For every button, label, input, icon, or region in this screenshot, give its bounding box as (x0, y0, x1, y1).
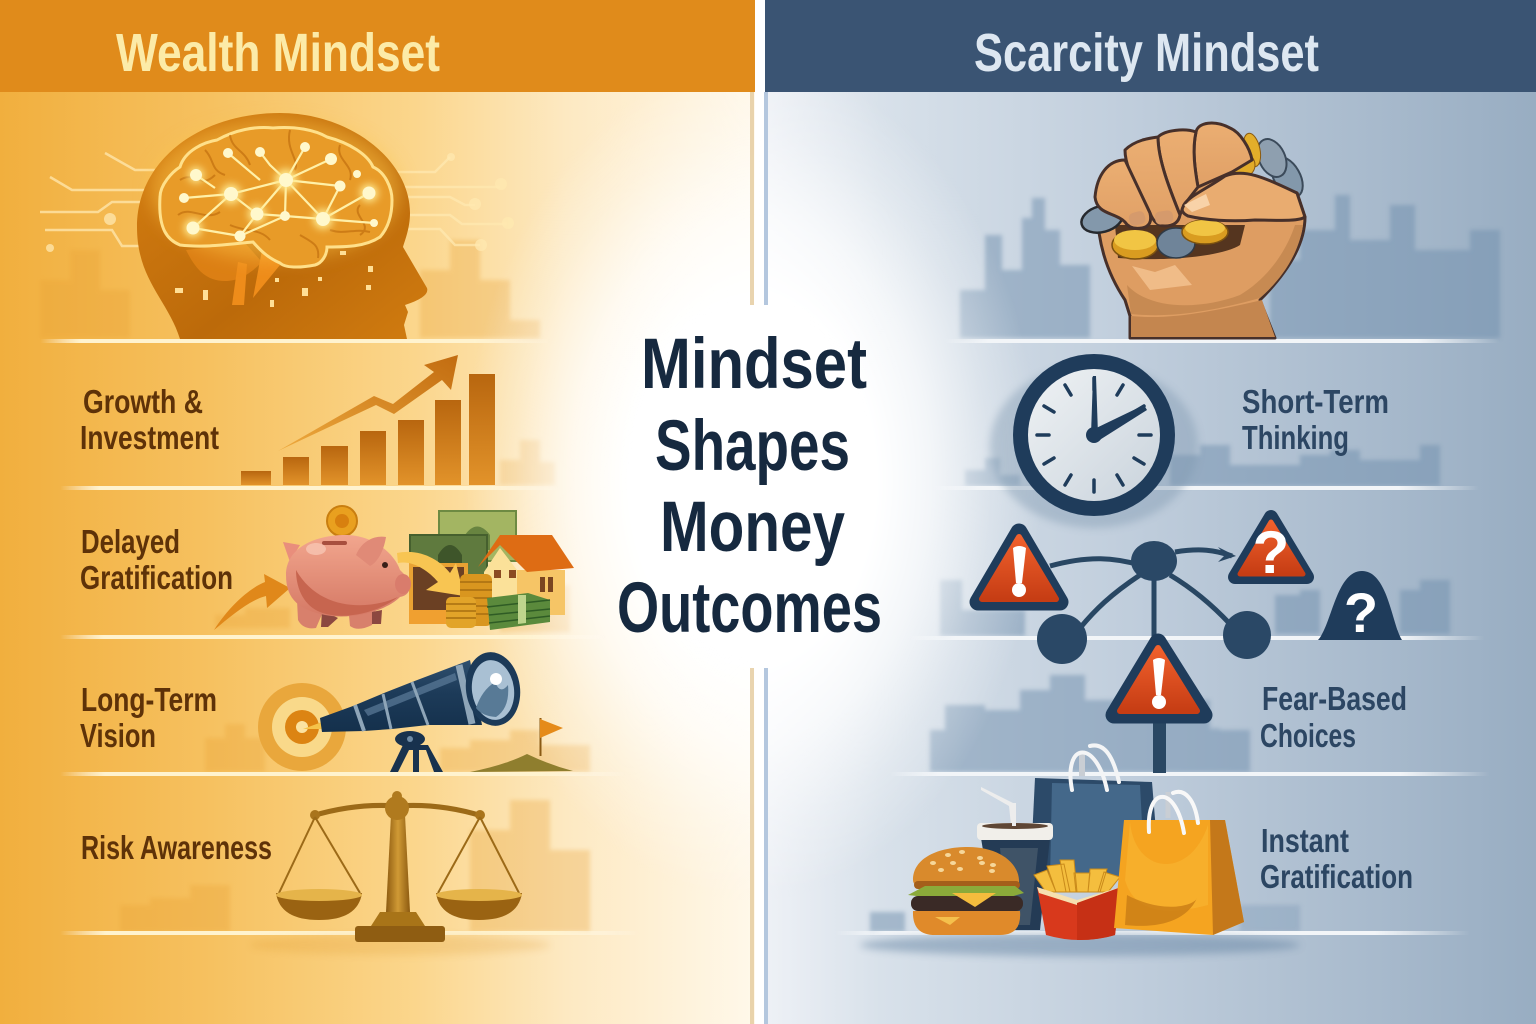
label: instant gratification (1260, 822, 1413, 895)
label: delayed gratification (80, 523, 233, 596)
label: growth & investment: Investment (80, 419, 219, 456)
label: fear-based choices: Choices (1260, 717, 1356, 754)
title: mindset shapes money outcomes: Mindset (641, 325, 867, 404)
title: mindset shapes money outcomes (617, 325, 882, 648)
label: long-term vision: Long-Term (81, 681, 217, 718)
heading bar: wealth mindset (0, 0, 755, 92)
label: instant gratification: Instant (1261, 822, 1349, 859)
panel: scarcity background (765, 92, 1536, 1024)
icon: piggy bank, money and house (214, 506, 574, 630)
icon: telescope with target and flag (258, 649, 573, 772)
label: short-term thinking: Short-Term (1242, 383, 1389, 420)
label: short-term thinking: Thinking (1242, 419, 1349, 456)
icon: balance scale (250, 791, 550, 955)
label: long-term vision (80, 681, 217, 754)
label: instant gratification: Gratification (1260, 858, 1413, 895)
title: mindset shapes money outcomes: Money (660, 488, 845, 567)
icon: clock (990, 354, 1198, 528)
heading bar: scarcity mindset (765, 0, 1536, 92)
label: delayed gratification: Delayed (81, 523, 180, 560)
title: mindset shapes money outcomes: Outcomes (617, 569, 882, 648)
icon: fist clutching coins (1078, 123, 1309, 338)
title: mindset shapes money outcomes: Shapes (655, 407, 850, 486)
icon: fast food and shopping bags (860, 745, 1300, 956)
icon: fear decision network with warnings (978, 517, 1402, 773)
label: fear-based choices: Fear-Based (1262, 680, 1407, 717)
left city silhouettes (40, 240, 590, 932)
heading bar: scarcity mindset: Scarcity Mindset (974, 23, 1319, 83)
icon: fear decision network with warnings: ? (1344, 581, 1378, 644)
icon: fear decision network with warnings: ? (1253, 519, 1289, 586)
panel: wealth background (0, 92, 755, 1024)
label: delayed gratification: Gratification (80, 559, 233, 596)
icon: glowing brain in head (40, 113, 514, 339)
heading bar: wealth mindset: Wealth Mindset (116, 23, 440, 83)
label: growth & investment (80, 383, 219, 456)
shelves (40, 339, 1500, 935)
divider lines (750, 92, 768, 1024)
label: short-term thinking (1242, 383, 1389, 456)
label: risk awareness: Risk Awareness (81, 829, 272, 866)
label: growth & investment: Growth & (83, 383, 203, 420)
right city silhouettes (870, 195, 1500, 932)
center glow (400, 92, 1110, 1024)
chart: rising bars with arrow (241, 355, 495, 485)
label: long-term vision: Vision (80, 717, 156, 754)
label: fear-based choices (1260, 680, 1407, 754)
